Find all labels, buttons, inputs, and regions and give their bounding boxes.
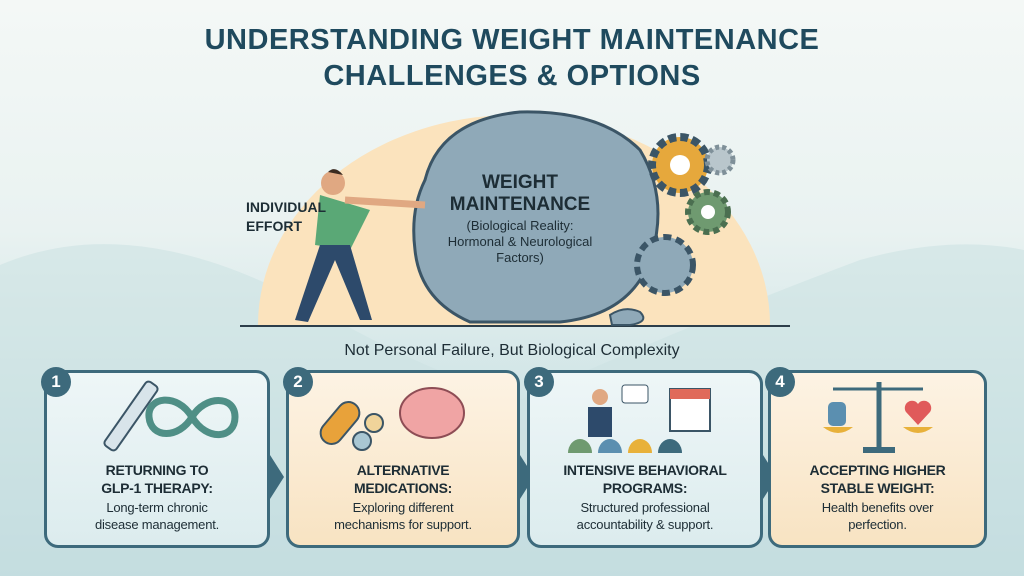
gears [652, 137, 708, 193]
label: individual effort: EFFORT [246, 218, 302, 234]
card 2: mechanisms for support. [334, 517, 472, 532]
label: individual effort [246, 199, 326, 234]
card 3: 3 [534, 372, 544, 391]
icon: pills and brain [320, 387, 465, 451]
card 2: ALTERNATIVE [357, 462, 449, 478]
card 3: INTENSIVE BEHAVIORAL [563, 462, 727, 478]
title [205, 24, 819, 92]
ground line [240, 325, 790, 327]
label: weight maintenance: MAINTENANCE [450, 194, 590, 215]
arrow 2 [520, 455, 534, 499]
card 3 [527, 370, 763, 548]
rock [414, 112, 658, 325]
card 4 [768, 370, 987, 548]
arrow 1 [270, 455, 284, 499]
icon: group and calendar [568, 384, 711, 453]
card 4: STABLE WEIGHT: [821, 480, 934, 496]
sun arc [258, 115, 770, 325]
subtitle: Not Personal Failure, But Biological Complexity [344, 342, 680, 359]
label: weight maintenance: (Biological Reality: [467, 218, 573, 233]
arrow 3 [763, 455, 777, 499]
card 3: accountability & support. [577, 517, 713, 532]
label: weight maintenance [448, 172, 592, 265]
person [295, 169, 425, 322]
card 1: 1 [51, 372, 61, 391]
card 4: Health benefits over [822, 500, 933, 515]
card 2: 2 [293, 372, 303, 391]
card 1 [44, 370, 270, 548]
label: weight maintenance: Factors) [496, 250, 544, 265]
card 3: PROGRAMS: [603, 480, 687, 496]
card 3: Structured professional [580, 500, 710, 515]
card 2: MEDICATIONS: [354, 480, 452, 496]
card 2 [286, 370, 520, 548]
card 2: Exploring different [353, 500, 453, 515]
icon: scale [823, 382, 933, 453]
card 4: ACCEPTING HIGHER [810, 462, 946, 478]
label: individual effort: INDIVIDUAL [246, 199, 326, 215]
label: weight maintenance: Hormonal & Neurological [448, 234, 592, 249]
label: weight maintenance: WEIGHT [482, 172, 558, 193]
card 4: 4 [775, 372, 785, 391]
card 1: GLP-1 THERAPY: [101, 480, 213, 496]
title: CHALLENGES & OPTIONS [323, 60, 701, 92]
card 1: RETURNING TO [106, 462, 208, 478]
card 4: perfection. [848, 517, 907, 532]
title: UNDERSTANDING WEIGHT MAINTENANCE [205, 24, 819, 56]
card 1: disease management. [95, 517, 219, 532]
card 1: Long-term chronic [106, 500, 208, 515]
icon: pen and infinity [103, 380, 238, 452]
